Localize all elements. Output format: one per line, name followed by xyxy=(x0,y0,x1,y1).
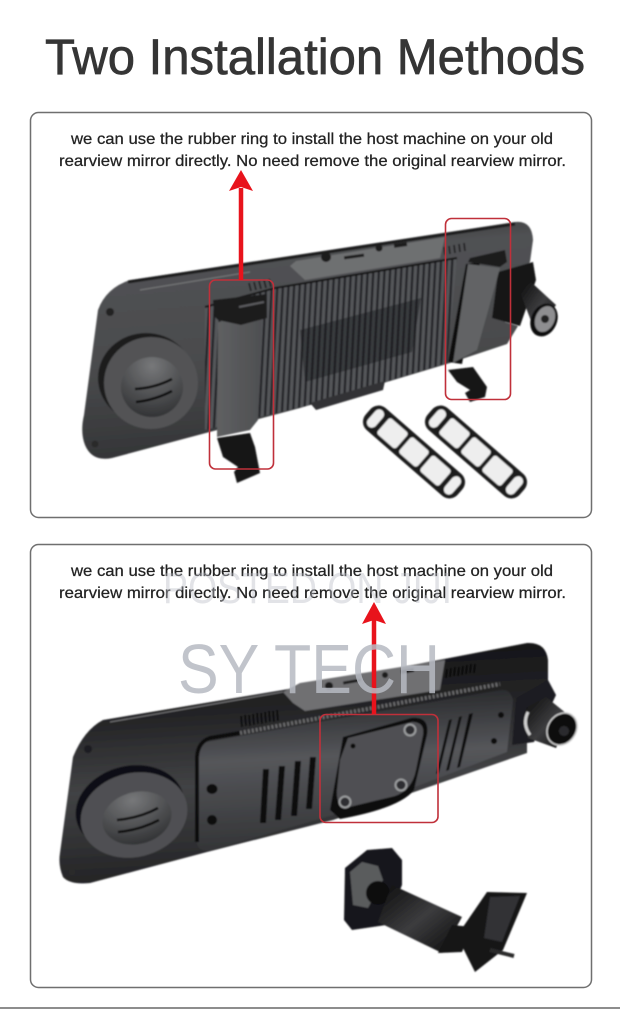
rubber rings xyxy=(358,401,532,503)
right clip bracket xyxy=(448,250,507,402)
round cover xyxy=(66,745,197,876)
mount plate xyxy=(330,718,427,819)
red arrow up xyxy=(229,170,253,280)
left clip bracket xyxy=(213,294,267,483)
plate vents xyxy=(260,713,473,823)
mirror with rubber ring brackets xyxy=(82,222,563,483)
suction mount arm xyxy=(344,848,527,972)
instruction text: bracket mount xyxy=(59,563,566,602)
red arrow up xyxy=(362,602,386,714)
panel: bracket mount installation xyxy=(30,544,592,988)
instruction text: bracket mount: we can use the rubber ring to install the host machine on your old xyxy=(70,563,553,580)
speaker and rib slots xyxy=(241,664,475,727)
mirror body xyxy=(59,643,548,883)
title: Two Installation Methods xyxy=(45,29,585,85)
instruction text: bracket mount: rearview mirror directly. No need remove the original rearview mirror. xyxy=(59,585,566,602)
red highlight box right xyxy=(446,218,510,400)
watermark: sy tech: SY TECH xyxy=(178,630,440,708)
control strip xyxy=(283,660,445,711)
red highlight box xyxy=(320,714,438,822)
control strip xyxy=(290,237,445,280)
panel: rubber ring installation xyxy=(30,112,592,518)
ribbed back panel xyxy=(205,258,457,430)
round cover xyxy=(92,308,198,448)
rear camera xyxy=(492,262,563,341)
instruction text: rubber ring: we can use the rubber ring to install the host machine on your old xyxy=(70,131,553,148)
back plate xyxy=(197,690,513,851)
bottom rule xyxy=(0,1007,620,1009)
mirror body xyxy=(82,222,533,459)
instruction text: rubber ring xyxy=(59,131,566,170)
speaker slots xyxy=(249,243,465,291)
mirror with mount plate xyxy=(59,643,583,883)
rubber ring right xyxy=(420,401,532,503)
red highlight box left xyxy=(210,280,274,469)
watermark: posted on jiji: POSTED ON JIJI xyxy=(163,564,452,613)
instruction text: rubber ring: rearview mirror directly. No need remove the original rearview mirror. xyxy=(59,153,566,170)
rear camera xyxy=(512,680,583,751)
rubber ring left xyxy=(358,401,470,503)
